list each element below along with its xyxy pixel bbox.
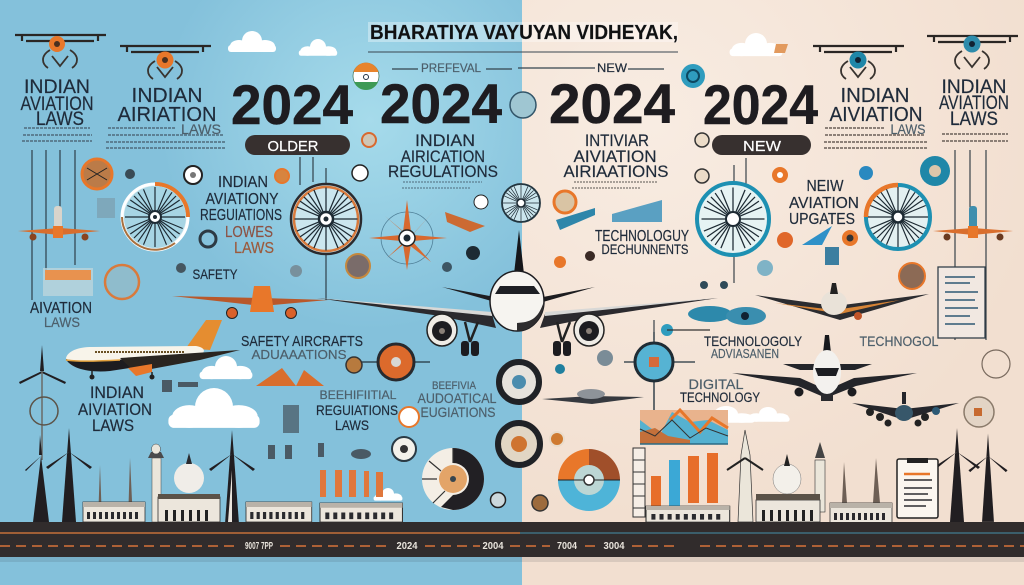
wheel dial: right centre blue	[697, 183, 769, 255]
text block: indian aviation laws, far left: INDIAN	[24, 77, 90, 98]
text block: technology documents: TECHNOLOGUY	[595, 228, 689, 245]
text block: regulations centre left: LOWES	[225, 224, 273, 241]
text block: technology documents	[595, 228, 689, 257]
text block: technology documents: DECHUNNENTS	[602, 241, 688, 257]
text block: indian airication regulations: AIRICATION	[401, 147, 485, 166]
text block: digital technology	[680, 376, 761, 405]
sub labels: prefeval and new	[392, 61, 664, 75]
text block: intiviar aiviation airiaations: AIVIATION	[574, 147, 656, 166]
runway timeline: 7004	[557, 541, 577, 552]
text block: indian airication regulations: REGULATIONS	[388, 162, 498, 181]
runway timeline: 2004	[482, 541, 504, 552]
text block: regulations centre left: SAFETY	[192, 266, 238, 282]
text block: indian airiation laws	[106, 85, 225, 148]
year headings 2024	[231, 72, 818, 136]
orange propeller plane centre left	[172, 286, 328, 318]
year headings 2024: 2024	[380, 72, 502, 135]
text block: indian airiation laws: INDIAN	[132, 85, 202, 107]
text block: audoatical regulations: EUGIATIONS	[420, 404, 496, 420]
pill: older: OLDER	[268, 138, 319, 155]
disc chart left	[422, 448, 484, 510]
wheel dial: partial at centre	[502, 184, 540, 222]
document icon: left	[43, 268, 93, 296]
clouds: sky	[168, 31, 790, 501]
text block: aviation laws left: LAWS	[44, 314, 80, 330]
text block: aviation laws left	[30, 300, 92, 330]
text block: regulations laws: LAWS	[335, 417, 369, 433]
text block: new aviation upgates: AVIATION	[789, 195, 859, 212]
windmills: left	[19, 345, 255, 524]
pie chart right	[558, 449, 620, 511]
background: blue older half	[0, 0, 523, 585]
small round icons: left side	[82, 133, 488, 299]
airliner left	[66, 320, 240, 380]
text block: audoatical regulations: AUDOATICAL	[418, 390, 497, 406]
text block: indian aviation right: LAWS	[890, 121, 926, 137]
gauge: orange	[346, 344, 430, 380]
text block: indian aviation laws, far left	[20, 77, 94, 141]
text block: indian aiviation laws lower: INDIAN	[90, 383, 144, 402]
gauge: blue	[624, 324, 710, 415]
sub labels: prefeval and new: NEW	[597, 61, 628, 75]
text block: audoatical regulations	[418, 380, 497, 420]
area chart	[640, 410, 728, 444]
text block: indian aiviation laws lower: LAWS	[92, 416, 134, 435]
text block: safety aircrafts: SAFETY AIRCRAFTS	[241, 333, 363, 350]
runway timeline	[0, 522, 1024, 562]
central airliner	[317, 230, 718, 356]
jet lower right	[732, 335, 917, 401]
text block: intiviar aiviation airiaations: AIRIAATIONS	[564, 162, 668, 181]
orange mountain illustration left	[256, 368, 324, 386]
text block: intiviar aiviation airiaations	[564, 131, 668, 188]
text block: digital technology: TECHNOLOGY	[680, 389, 761, 405]
sketch devices left	[162, 380, 371, 459]
text block: regulations laws	[316, 388, 398, 433]
text block: regulations laws: REGUIATIONS	[316, 402, 398, 418]
wheel dial: right	[866, 185, 930, 249]
text block: indian aiviation laws lower	[78, 383, 152, 435]
windmills: right	[934, 428, 1008, 522]
text block: indian aviation laws, far right	[939, 77, 1009, 141]
text block: technology advasanen	[704, 333, 939, 361]
text block: regulations centre left: LAWS	[234, 240, 274, 257]
text block: indian aviation laws, far left: AVIATION	[20, 94, 94, 115]
wheel dial: left	[122, 184, 188, 250]
document icon: right	[938, 267, 985, 338]
text block: intiviar aiviation airiaations: INTIVIAR	[585, 131, 649, 150]
runway timeline: 3004	[604, 541, 625, 552]
text block: indian aviation right: AIVIATION	[830, 104, 922, 126]
text block: safety aircrafts: ADUAAATIONS	[252, 347, 347, 362]
compass star	[369, 200, 447, 270]
small orange plane far left	[18, 206, 100, 240]
text block: regulations centre left	[192, 174, 282, 282]
mosque skyline right	[727, 430, 892, 523]
decorative vertical guides and connectors	[32, 150, 986, 415]
text block: indian airiation laws: AIRIATION	[118, 104, 216, 126]
text block: technology advasanen: TECHNOLOGOLY	[704, 333, 803, 349]
text block: new aviation upgates: UPGATES	[789, 211, 855, 228]
title: BHARATIYA VAYUYAN VIDHEYAK,	[370, 22, 678, 44]
text block: indian airication regulations: INDIAN	[415, 131, 475, 150]
text block: technology advasanen: ADVIASANEN	[711, 346, 779, 361]
text block: audoatical regulations: BEEFIVIA	[432, 380, 477, 392]
sub labels: prefeval and new: PREFEVAL	[421, 61, 481, 75]
year headings 2024: 2024	[549, 72, 675, 135]
clipboard document	[897, 458, 938, 518]
text block: safety aircrafts	[241, 333, 363, 362]
mosque skyline left	[83, 444, 402, 522]
text block: indian aviation laws, far right: INDIAN	[942, 77, 1006, 98]
text block: regulations centre left: INDIAN	[218, 174, 268, 191]
text block: indian aviation laws, far right: LAWS	[950, 109, 998, 130]
pill: new	[712, 135, 811, 155]
runway timeline: 9007 7PP	[245, 541, 273, 552]
plane with engines right	[852, 392, 959, 426]
text block: indian airiation laws: LAWS	[181, 121, 221, 137]
text block: indian aiviation laws lower: AIVIATION	[78, 400, 152, 419]
pill: new: NEW	[743, 138, 782, 155]
orange bars left	[320, 470, 383, 497]
text block: aviation laws left: AIVATION	[30, 300, 92, 317]
small round icons: right side	[510, 64, 950, 289]
text block: new aviation upgates	[789, 178, 859, 228]
text block: new aviation upgates: NEIW	[806, 178, 844, 195]
background: peach new half	[522, 0, 1024, 585]
text block: regulations laws: BEEHIFIITIAL	[320, 388, 397, 402]
year headings 2024: 2024	[231, 73, 353, 136]
text block: regulations centre left: AVIATIONY	[206, 191, 279, 208]
saucer craft	[542, 389, 644, 404]
plane right of centre	[755, 283, 929, 320]
pill: older	[245, 135, 350, 155]
text block: indian aviation right: INDIAN	[840, 85, 910, 107]
text block: digital technology: DIGITAL	[688, 376, 744, 392]
text block: indian airication regulations	[388, 131, 498, 188]
text block: indian aviation right	[824, 85, 928, 148]
text block: regulations centre left: REGUIATIONS	[200, 207, 282, 224]
round icons around centre	[392, 350, 1010, 511]
drones: left	[15, 35, 211, 79]
blue pods under central wing	[688, 281, 766, 325]
bar chart	[633, 448, 730, 522]
text block: indian aviation laws, far right: AVIATION	[939, 93, 1009, 114]
text block: technology advasanen: TECHNOGOL	[860, 333, 939, 349]
wheel dial: left centre	[291, 184, 361, 254]
year headings 2024: 2024	[703, 73, 818, 136]
drones: right	[813, 36, 1018, 79]
small orange plane far right	[933, 206, 1013, 240]
runway timeline: 2024	[396, 541, 418, 552]
icon: india flag	[353, 63, 379, 90]
text block: indian aviation laws, far left: LAWS	[36, 109, 84, 130]
